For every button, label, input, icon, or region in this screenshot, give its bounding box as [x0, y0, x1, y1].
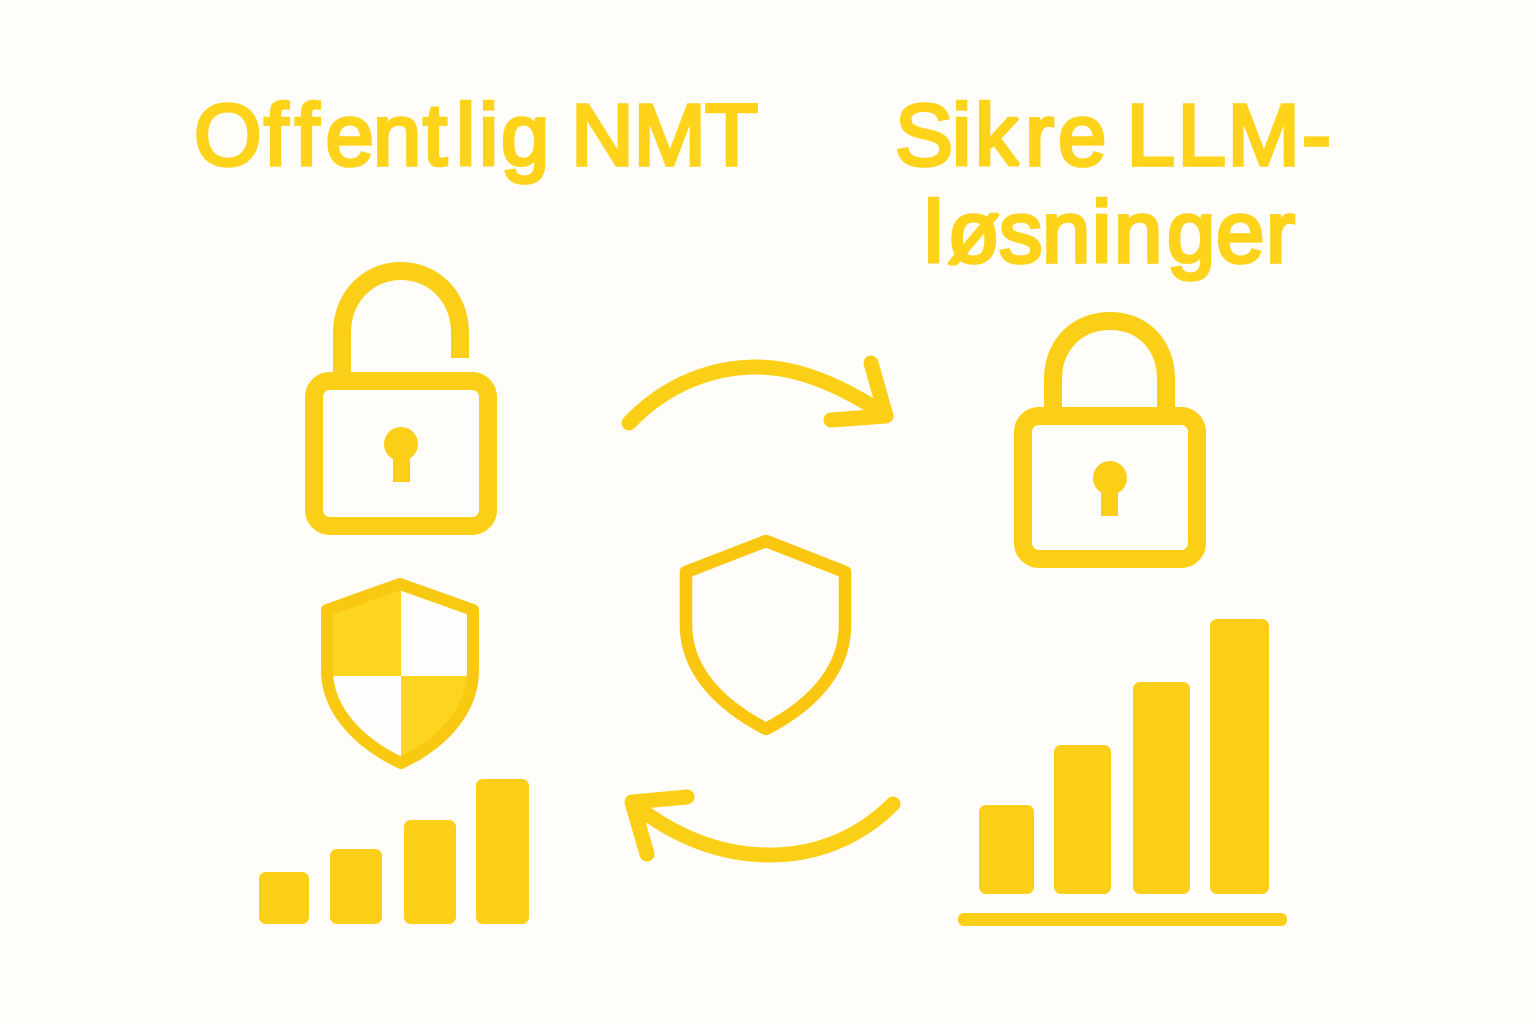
title: Sikre LLM-løsninger: LLM-: [1126, 87, 1331, 184]
title: Offentlig NMT: Offentlig: [194, 87, 549, 184]
title: Offentlig NMT: [194, 87, 758, 184]
icon: open padlock: [314, 271, 488, 526]
bar chart: small: [259, 779, 529, 924]
bar chart: large: [958, 619, 1287, 926]
title: Sikre LLM-løsninger: Sikre: [895, 87, 1106, 184]
icon: outline shield: [686, 541, 845, 729]
title: Sikre LLM-løsninger: løsninger: [924, 184, 1295, 281]
title: Sikre LLM-løsninger: [895, 87, 1331, 281]
arrow: top curved arrow: [629, 363, 886, 423]
icon: quartered shield: [327, 584, 473, 763]
arrow: bottom curved arrow: [632, 797, 893, 855]
icon: closed padlock: [1023, 321, 1197, 559]
title: Offentlig NMT: NMT: [571, 87, 758, 184]
